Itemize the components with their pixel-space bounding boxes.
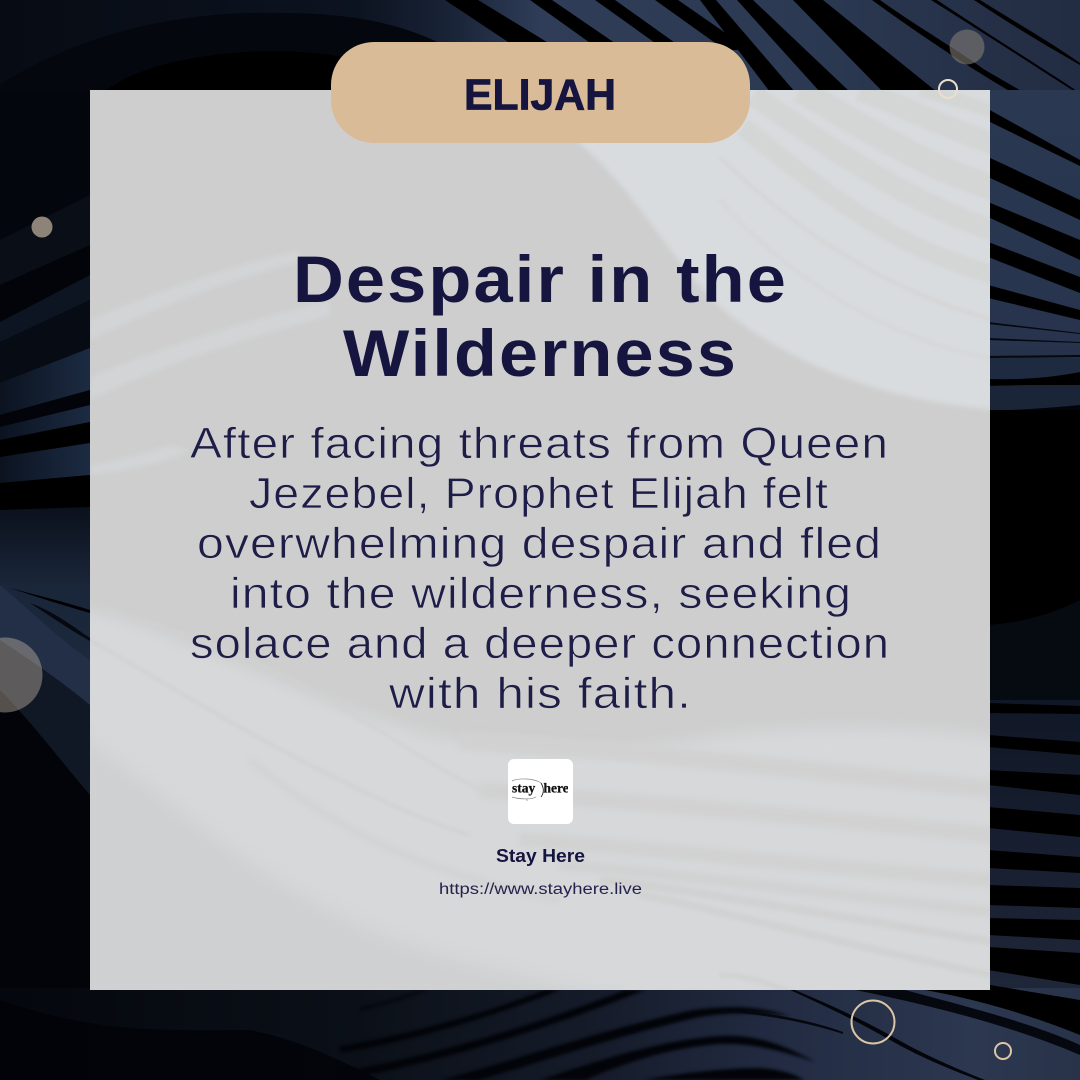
decorative circle: grey top right — [950, 30, 984, 64]
bottom band — [0, 988, 1080, 1080]
top band — [0, 0, 1080, 95]
logo: Stay Here — [508, 759, 573, 824]
decorative ring: bottom large — [852, 1000, 894, 1044]
decorative ring: bottom small — [995, 1043, 1011, 1059]
body paragraph: solace and a deeper connection — [190, 619, 890, 668]
brand name: Stay Here — [496, 846, 585, 866]
tag pill: ELIJAH — [331, 42, 750, 143]
body paragraph: After facing threats from Queen — [190, 419, 889, 468]
body paragraph: with his faith. — [388, 669, 692, 718]
tag pill: ELIJAH: ELIJAH — [464, 70, 616, 120]
body paragraph: overwhelming despair and fled — [197, 519, 882, 568]
panel: white textured card — [80, 80, 1000, 1000]
decorative circle: small tan dot left — [32, 216, 52, 238]
logo: Stay Here: here — [544, 780, 569, 796]
lower light waves — [80, 607, 1000, 1000]
right column bands — [988, 90, 1080, 405]
body paragraph: into the wilderness, seeking — [230, 569, 852, 618]
decorative ring: top right — [939, 80, 957, 98]
left soft diagonals — [90, 250, 330, 475]
body paragraph — [190, 419, 890, 718]
website url: https://www.stayhere.live — [439, 881, 642, 898]
title — [293, 242, 788, 390]
logo: Stay Here: stay — [512, 780, 535, 796]
decorative circle: large translucent left — [0, 638, 42, 712]
title: Wilderness — [343, 316, 738, 390]
body paragraph: Jezebel, Prophet Elijah felt — [249, 469, 829, 518]
left column bands — [0, 90, 90, 300]
top-right fan of light ribbons — [570, 80, 1000, 410]
title: Despair in the — [293, 242, 788, 316]
